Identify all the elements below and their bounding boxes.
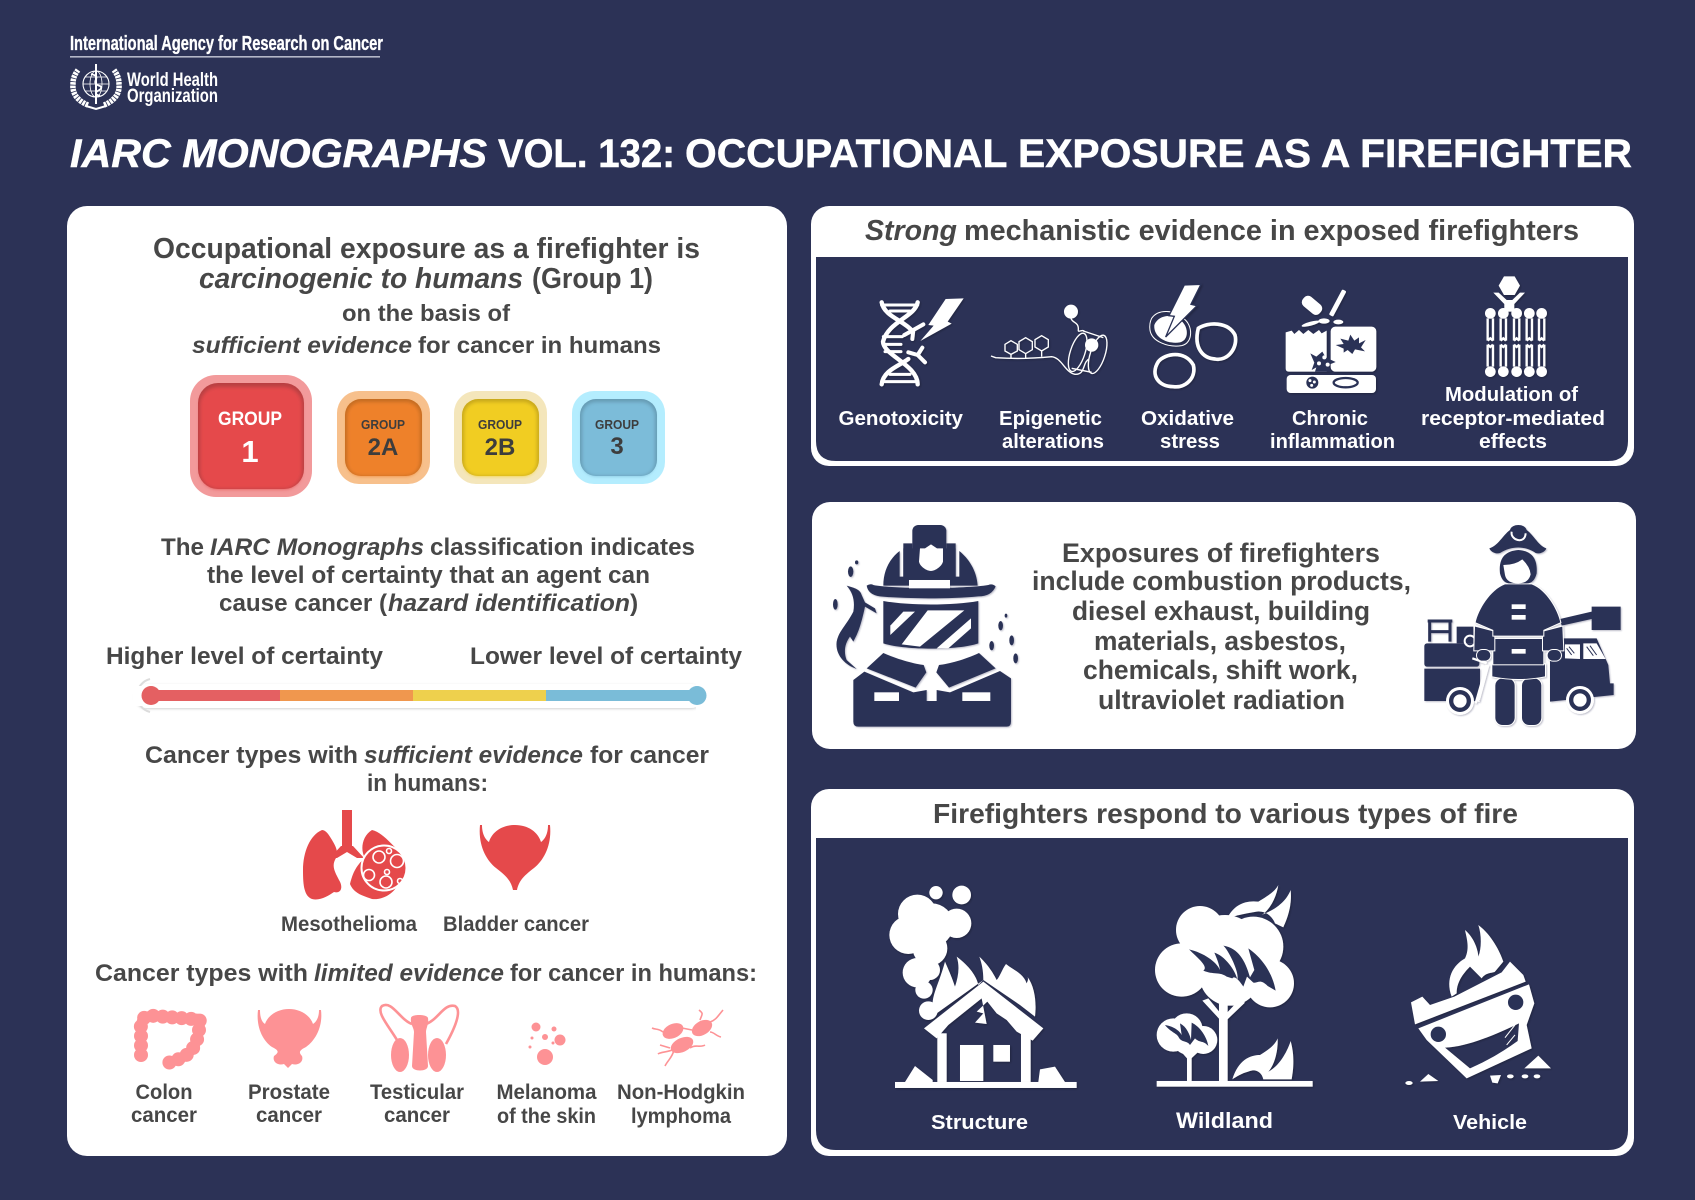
label: higher certainty: Higher level of certainty (106, 643, 383, 670)
labels: limited evidence cancers: Non-Hodgkin (617, 1081, 745, 1104)
icon: WHO emblem (73, 64, 119, 109)
scale bar (133, 679, 708, 712)
icon: vehicle fire (1405, 925, 1551, 1085)
firefighter figure (1474, 584, 1563, 725)
header: IARC and WHO logos: Organization (127, 86, 218, 107)
text: classification explanation: the level of certainty that an agent can (207, 562, 650, 589)
panel: classification and cancer types (67, 206, 787, 1156)
icon: oxidative stress (1150, 284, 1236, 387)
heading: Group 1 classification: Occupational exposure as a firefighter is (153, 233, 700, 265)
icon: firefighter with truck (1424, 525, 1621, 725)
badge: Group 1: GROUP (218, 409, 282, 430)
text: classification explanation: IARC Monographs (210, 534, 424, 561)
labels: mechanisms (838, 383, 1605, 453)
labels: mechanisms: Modulation of (1445, 383, 1578, 406)
labels: mechanisms: Epigenetic (999, 407, 1102, 430)
labels: mechanisms: inflammation (1270, 430, 1395, 453)
title: OCCUPATIONAL EXPOSURE AS A FIREFIGHTER (685, 132, 1632, 176)
labels: limited evidence cancers: cancer (384, 1104, 450, 1127)
title: VOL. 132: (498, 132, 675, 176)
labels: mechanisms: effects (1479, 430, 1547, 453)
labels: mechanisms: Oxidative (1141, 407, 1234, 430)
badge: Group 3: GROUP (595, 417, 639, 432)
icon: colon (141, 1016, 200, 1063)
badge: Group 2A: GROUP (361, 417, 405, 432)
labels: limited evidence cancers: Colon (136, 1081, 192, 1104)
heading: limited evidence cancers: Cancer types with (95, 960, 308, 987)
icon: testicular (380, 1005, 458, 1072)
heading: Group 1 classification: carcinogenic to humans (199, 263, 523, 295)
label: lower certainty: Lower level of certainty (470, 643, 742, 670)
labels: limited evidence cancers: Prostate (248, 1081, 330, 1104)
heading: limited evidence cancers (95, 960, 757, 987)
heading: sufficient evidence cancers: Cancer types with (145, 742, 358, 769)
labels: fire types: Structure (931, 1111, 1028, 1134)
text: classification explanation (161, 534, 695, 617)
labels: limited evidence cancers: Testicular (370, 1081, 464, 1104)
heading: mechanistic evidence: Strong (865, 215, 957, 247)
labels: limited evidence cancers: Melanoma (496, 1081, 597, 1104)
heading: sufficient evidence cancers: sufficient evidence (364, 742, 583, 769)
heading: Group 1 classification: for cancer in humans (418, 332, 661, 358)
heading: sufficient evidence cancers (145, 742, 709, 797)
heading: Group 1 classification (153, 233, 700, 358)
text: exposures: diesel exhaust, building (1072, 596, 1370, 626)
badge: Group 3: 3 (610, 433, 624, 460)
label: bladder cancer: Bladder cancer (443, 913, 589, 936)
badge: Group 2B (454, 391, 547, 484)
heading: Group 1 classification: on the basis of (342, 300, 510, 326)
badge: Group 1: 1 (241, 434, 259, 469)
badge: Group 2B: GROUP (478, 417, 522, 432)
text: exposures: include combustion products, (1032, 566, 1411, 596)
heading: sufficient evidence cancers: for cancer (590, 742, 709, 769)
title: IARC MONOGRAPHS (70, 132, 487, 176)
text: exposures: chemicals, shift work, (1083, 655, 1358, 685)
labels: limited evidence cancers: of the skin (497, 1105, 596, 1128)
labels: mechanisms: receptor-mediated (1421, 407, 1605, 430)
panel: mechanistic evidence (811, 206, 1634, 466)
labels: mechanisms: Chronic (1292, 407, 1368, 430)
text: classification explanation: The (161, 534, 204, 561)
heading: limited evidence cancers: for cancer in humans: (510, 960, 757, 987)
badge: Group 3 (572, 391, 665, 484)
icon: chronic inflammation (1286, 289, 1376, 393)
icon: melanoma (528, 1022, 566, 1065)
heading: sufficient evidence cancers: in humans: (367, 770, 488, 797)
panel: types of fire (811, 789, 1634, 1156)
badge: Group 1 (190, 375, 312, 497)
panel: exposures of firefighters (812, 502, 1636, 749)
icon: lungs with mesothelioma (303, 810, 406, 899)
agency name: International Agency for Research on Cancer (70, 33, 383, 55)
header: IARC and WHO logos (70, 33, 383, 109)
icon: DNA with lightning (882, 298, 964, 384)
WHO name: World Health (127, 70, 218, 91)
text: classification explanation: classification indicates (430, 534, 695, 561)
labels: limited evidence cancers: cancer (131, 1104, 197, 1127)
labels: limited evidence cancers: cancer (256, 1104, 322, 1127)
badge: Group 2B: 2B (485, 434, 515, 461)
text: classification explanation: cause cancer ( (219, 590, 388, 617)
labels: fire types: Vehicle (1453, 1111, 1527, 1134)
icon: epigenetic alterations (991, 305, 1111, 376)
icon: structure fire (889, 886, 1077, 1088)
fire truck (1424, 607, 1621, 715)
labels: limited evidence cancers (131, 1081, 745, 1128)
text: exposures (1032, 538, 1411, 715)
text: exposures: materials, asbestos, (1094, 626, 1346, 656)
text: classification explanation: ) (630, 590, 638, 617)
heading: mechanistic evidence: mechanistic evidence in exposed firefighters (964, 215, 1579, 247)
label: mesothelioma: Mesothelioma (281, 913, 417, 936)
icon: firefighter portrait (833, 525, 1018, 727)
labels: mechanisms: Genotoxicity (838, 407, 964, 430)
certainty scale (106, 643, 742, 712)
labels: fire types (931, 1108, 1527, 1134)
icon: wildland fire (1155, 885, 1313, 1087)
labels: fire types: Wildland (1176, 1108, 1273, 1133)
text: exposures: Exposures of firefighters (1062, 538, 1380, 568)
text: exposures: ultraviolet radiation (1098, 685, 1345, 715)
icon: bladder (480, 825, 550, 890)
labels: limited evidence cancers: lymphoma (631, 1105, 731, 1128)
heading: types of fire: Firefighters respond to various types of fire (933, 798, 1518, 829)
labels: mechanisms: stress (1160, 430, 1220, 453)
badge: Group 2A (337, 391, 430, 484)
heading: Group 1 classification: (Group 1) (532, 263, 653, 295)
text: classification explanation: hazard identification (388, 590, 630, 617)
icon: receptor-mediated effects (1485, 276, 1547, 377)
icon: prostate (258, 1009, 321, 1068)
head and helmet (1489, 525, 1546, 583)
heading: Group 1 classification: sufficient evidence (192, 332, 412, 358)
labels: mechanisms: alterations (1002, 430, 1104, 453)
heading: limited evidence cancers: limited evidence (314, 960, 504, 987)
badge: Group 2A: 2A (368, 434, 398, 461)
icon: lymphoma cells (652, 1010, 723, 1066)
title (70, 132, 1632, 176)
